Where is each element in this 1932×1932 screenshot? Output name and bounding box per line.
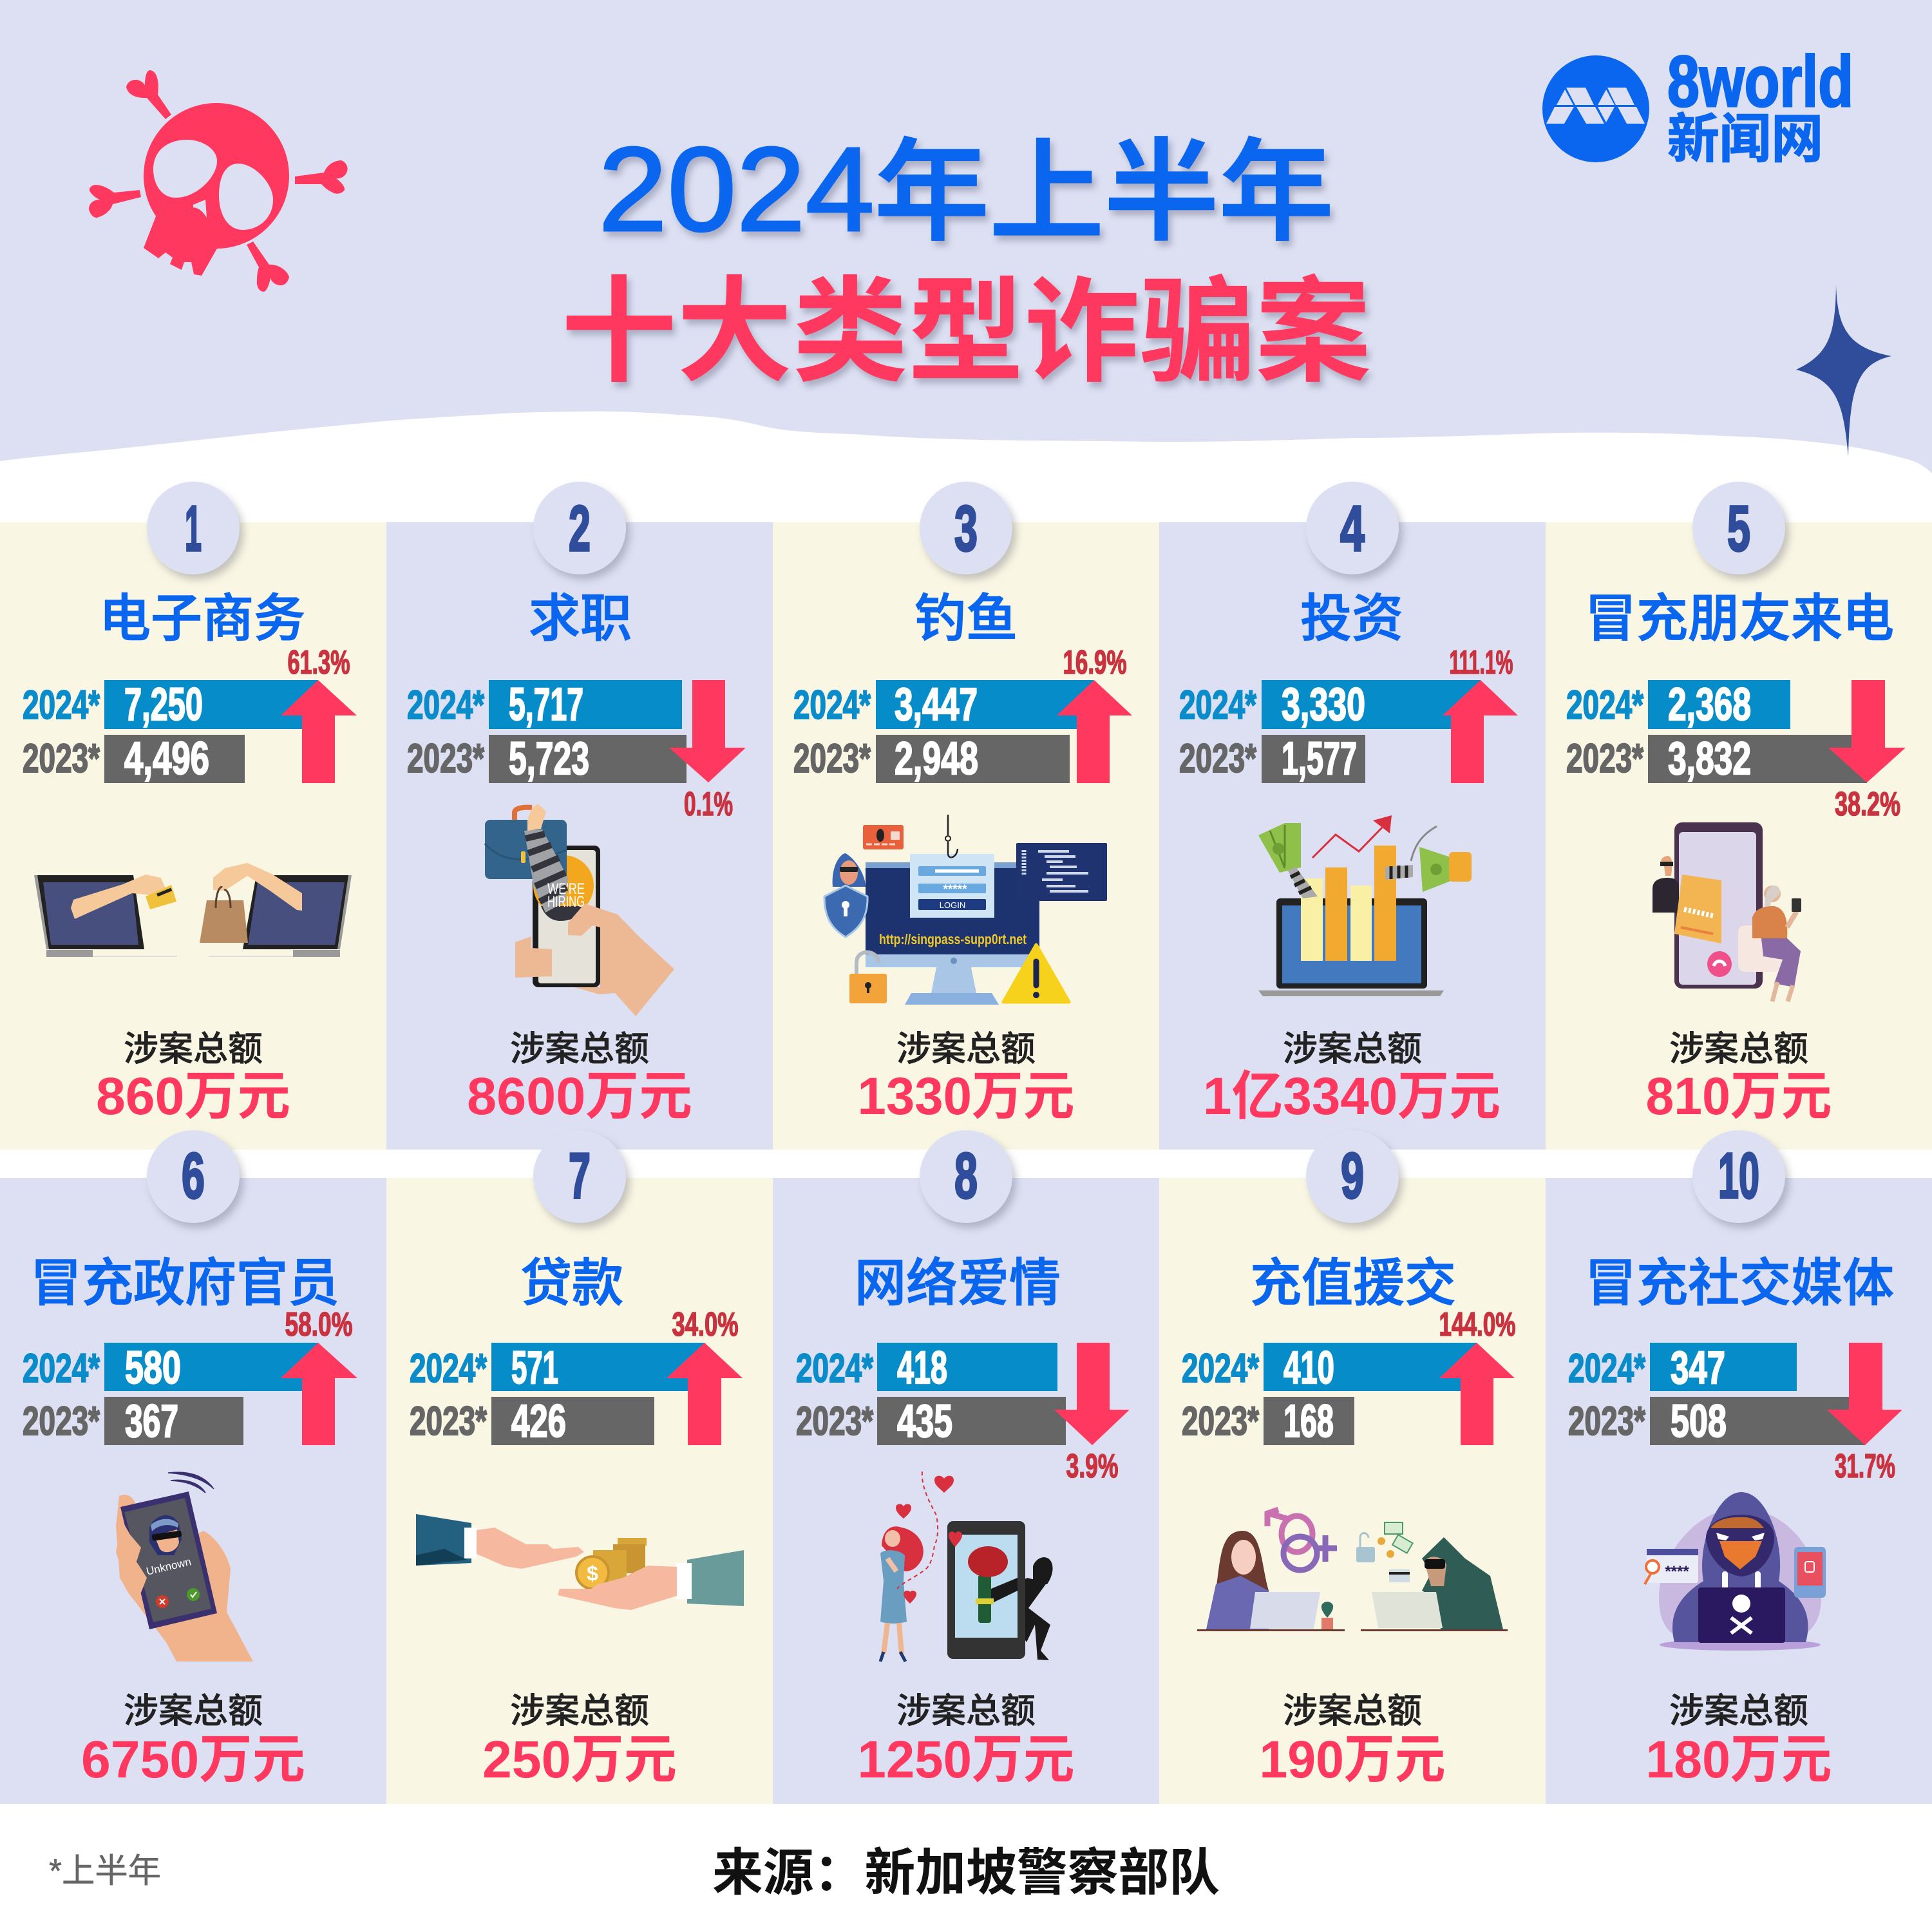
bar chart: 2023* [410,1399,487,1444]
bar chart [793,644,1132,784]
bar chart: 2024* [793,683,871,728]
bar chart: 7,250 [124,679,203,730]
bar chart: 2,948 [895,734,978,784]
heading: 求职 [529,590,632,647]
number badge 9 [1306,1130,1399,1223]
icon: job scam phone and briefcase [485,804,674,1016]
total label: 涉案总额 [896,1030,1036,1068]
total label: 涉案总额 [124,1030,263,1068]
icon: job scam phone and briefcase: HIRING [547,893,585,911]
bar chart: 38.2% [1835,786,1900,823]
title: 2024年上半年 [598,123,1334,256]
heading: 网络爱情 [855,1255,1061,1312]
icon: hands exchanging coins [416,1514,744,1610]
icon: romance scam phone [880,1472,1053,1662]
number badge 1: 1 [185,493,202,565]
bar chart: 3,330 [1282,679,1365,730]
icon: hooded social media hacker: **** [1665,1563,1689,1580]
title: 十大类型诈骗案 [561,268,1371,396]
bar chart: 3,832 [1668,734,1751,784]
icon: hooded social media hacker [1645,1492,1826,1651]
bar chart: 2024* [1568,1346,1645,1391]
bar chart: 2023* [1568,1399,1645,1444]
bar chart: 2024* [1566,683,1643,728]
bar chart: 2023* [1566,736,1643,781]
number badge 4: 4 [1340,493,1365,565]
panel: card 1 e-commerce [0,482,386,1150]
number badge 5 [1692,482,1785,574]
total label: 涉案总额 [1283,1692,1422,1730]
bar chart: 2023* [407,736,484,781]
icon: four-point star [1796,285,1891,457]
bar chart: 2024* [1182,1346,1259,1391]
bar chart: 2023* [796,1399,873,1444]
icon: phishing login monitor: ***** [943,883,967,896]
bar chart: 58.0% [285,1306,353,1343]
number badge 10 [1692,1130,1785,1223]
total label: 涉案总额 [896,1692,1036,1730]
icon: hands exchanging coins: $ [587,1562,598,1585]
total amount: 180万元 [1646,1730,1832,1789]
header background wave [0,0,1932,473]
bar chart: 426 [511,1396,566,1447]
total amount: 250万元 [482,1730,677,1789]
heading: 投资 [1300,590,1403,647]
icon: woman and hacker at laptops [1197,1510,1508,1631]
bar chart [1566,679,1906,823]
icon: phishing login monitor [824,815,1107,1005]
number badge 8: 8 [954,1140,978,1212]
total amount: 810万元 [1646,1067,1832,1126]
number badge 9: 9 [1341,1140,1364,1212]
total label: 涉案总额 [1669,1030,1808,1068]
bar chart [23,1306,357,1447]
panel: card 2 job [386,482,773,1150]
heading: 冒充朋友来电 [1585,590,1894,647]
bar chart: 16.9% [1063,644,1127,681]
bar chart: 2024* [1179,683,1256,728]
number badge 6: 6 [182,1140,205,1212]
icon: unknown caller phone [116,1472,253,1662]
bar chart: 410 [1283,1343,1334,1394]
bar chart: 168 [1283,1396,1334,1447]
bar chart: 2023* [23,1399,100,1444]
number badge 2 [533,482,626,574]
icon: fake friend phone call [1653,822,1801,1001]
bar chart [796,1343,1130,1485]
panel: card 7 loan [386,1130,773,1804]
bar chart: 580 [125,1343,181,1394]
bar chart: 418 [897,1343,947,1394]
total amount: 1330万元 [858,1067,1074,1126]
bar chart [1568,1343,1902,1485]
bar chart: 5,723 [509,734,589,784]
bar chart: 2024* [410,1346,487,1391]
bar chart: 5,717 [509,679,583,730]
icon: phishing login monitor: http://singpass-supp0rt.net [879,931,1027,947]
bar chart: 3,447 [895,679,978,730]
bar chart: 571 [511,1343,558,1394]
bar chart: 367 [125,1396,178,1447]
panel: card 3 phishing [773,482,1159,1150]
total amount: 1250万元 [858,1730,1074,1789]
title [561,123,1371,396]
total label: 涉案总额 [124,1692,263,1730]
bar chart: 31.7% [1835,1448,1895,1485]
bar chart: 2024* [407,683,484,728]
bar chart [1182,1306,1516,1447]
bar chart: 2024* [23,683,100,728]
bar chart: 2023* [1179,736,1256,781]
bar chart: 2023* [1182,1399,1259,1444]
icon: laptops exchanging card and bag [34,863,352,957]
heading: 冒充社交媒体 [1585,1255,1894,1312]
panel: card 9 top-up escort [1159,1130,1546,1804]
number badge 5: 5 [1727,493,1750,565]
total amount: 8600万元 [467,1067,692,1126]
bar chart: 435 [897,1396,952,1447]
bar chart: 2,368 [1668,679,1751,730]
panel: card 10 impersonating social media [1546,1130,1932,1804]
number badge 3 [920,482,1012,574]
bar chart [407,679,746,823]
bar chart: 34.0% [672,1306,738,1343]
panel: card 6 impersonating officials [0,1130,386,1804]
number badge 7 [533,1130,626,1223]
bar chart: 2023* [23,736,100,781]
heading: 电子商务 [99,590,305,647]
heading: 冒充政府官员 [30,1255,339,1312]
number badge 6 [147,1130,240,1223]
bar chart: 111.1% [1449,644,1513,681]
logo: 8world [1542,41,1853,169]
total amount: 190万元 [1260,1730,1445,1789]
total label: 涉案总额 [510,1692,649,1730]
number badge 1 [147,482,240,574]
bar chart: 1,577 [1282,734,1357,784]
icon: phishing login monitor: LOGIN [940,900,965,910]
total amount: 6750万元 [81,1730,305,1789]
bar chart [23,644,357,784]
number badge 8 [920,1130,1012,1223]
number badge 4 [1306,482,1399,574]
number badge 2: 2 [569,493,591,565]
total amount: 860万元 [96,1067,290,1126]
total label: 涉案总额 [1283,1030,1422,1068]
icon: skull and crossbones [89,70,348,292]
bar chart: 0.1% [684,786,733,823]
heading: 贷款 [520,1255,623,1312]
heading: 钓鱼 [914,590,1018,647]
bar chart: 61.3% [287,644,350,681]
bar chart: 3.9% [1066,1448,1118,1485]
icon: unknown caller phone: Unknown [145,1555,193,1578]
bar chart: 2024* [796,1346,873,1391]
source: 来源：新加坡警察部队 [712,1844,1220,1901]
icon: job scam phone and briefcase: WE'RE [547,880,585,898]
panel: card 8 online love [773,1130,1159,1804]
number badge 3: 3 [954,493,978,565]
bar chart: 4,496 [124,734,209,784]
bar chart: 2023* [793,736,871,781]
total label: 涉案总额 [510,1030,649,1068]
total label: 涉案总额 [1669,1692,1808,1730]
panel: card 5 impersonating friends [1546,482,1932,1150]
number badge 7: 7 [569,1140,591,1212]
number badge 10: 10 [1718,1140,1759,1212]
bar chart: 2024* [23,1346,100,1391]
panel: card 4 investment [1159,482,1546,1150]
bar chart: 347 [1671,1343,1725,1394]
heading: 充值援交 [1250,1255,1456,1312]
total amount: 1亿3340万元 [1203,1067,1501,1126]
bar chart: 144.0% [1439,1306,1516,1343]
footnote: *上半年 [49,1853,161,1890]
icon: investment laptop and chart [1258,815,1472,996]
logo: 8world: 新闻网 [1667,110,1823,169]
bar chart [1179,644,1518,784]
bar chart [410,1306,743,1447]
logo: 8world: 8world [1667,41,1853,122]
bar chart: 508 [1671,1396,1727,1447]
